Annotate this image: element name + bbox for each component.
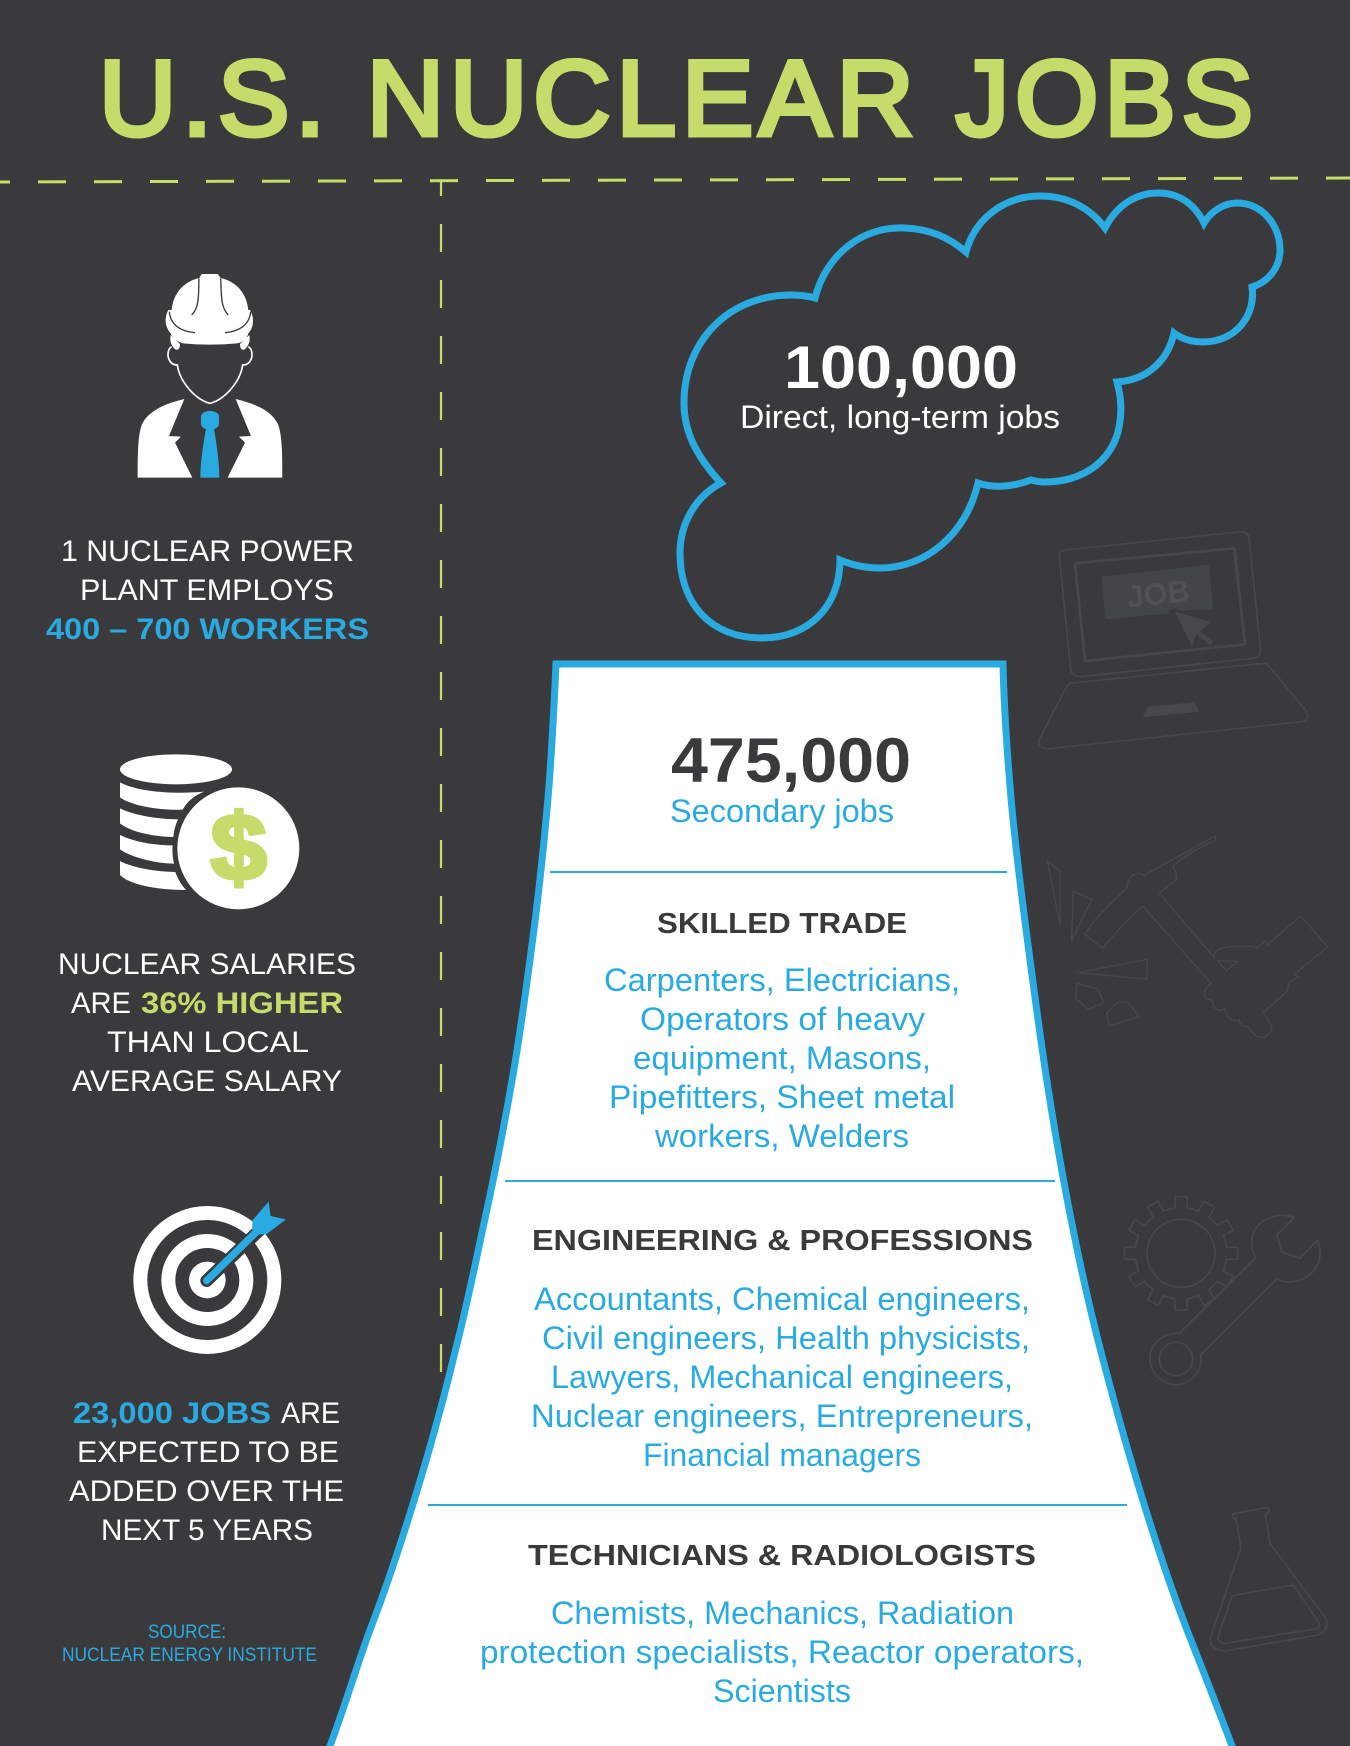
icon: laptop with job button: JOB (1125, 574, 1191, 615)
icon: gear and wrench (1124, 1197, 1320, 1385)
skilled trade section: Operators of heavy (640, 1001, 925, 1037)
stat: salaries: THAN LOCAL (107, 1026, 309, 1059)
stat: salaries: NUCLEAR SALARIES (58, 948, 356, 981)
stat: workers per plant (46, 535, 369, 646)
engineering and professions section: Accountants, Chemical engineers, (534, 1281, 1030, 1317)
skilled trade section: Pipefitters, Sheet metal (609, 1079, 955, 1115)
icon: pickaxe and hand (1047, 836, 1328, 1037)
stat: workers per plant: PLANT EMPLOYS (80, 574, 334, 607)
cloud caption: Direct, long-term jobs (740, 399, 1060, 435)
icon: coin stack with dollar (120, 754, 299, 909)
secondary jobs caption: Secondary jobs (670, 793, 894, 829)
stat: salaries (58, 948, 356, 1098)
skilled trade section: workers, Welders (654, 1118, 909, 1154)
stat: salaries: AVERAGE SALARY (72, 1065, 342, 1098)
skilled trade section: SKILLED TRADE (657, 908, 907, 940)
engineering and professions section: ENGINEERING & PROFESSIONS (532, 1225, 1033, 1257)
icon: worker in hard hat (138, 274, 282, 478)
stat: jobs to be added: 23,000 JOBS (73, 1397, 271, 1430)
cloud figure: 100,000 (784, 334, 1018, 401)
icon: laboratory flask (1210, 1508, 1327, 1651)
stat: salaries: 36% HIGHER (141, 987, 343, 1020)
panel: cooling tower (326, 664, 1236, 1746)
technicians and radiologists section: TECHNICIANS & RADIOLOGISTS (528, 1540, 1036, 1572)
skilled trade section: Carpenters, Electricians, (604, 962, 960, 998)
engineering and professions section: Lawyers, Mechanical engineers, (551, 1359, 1013, 1395)
skilled trade section: equipment, Masons, (633, 1040, 931, 1076)
stat: jobs to be added (69, 1397, 344, 1547)
stat: jobs to be added: ADDED OVER THE (69, 1475, 344, 1508)
engineering and professions section (531, 1225, 1033, 1473)
stat: jobs to be added: NEXT 5 YEARS (101, 1514, 313, 1547)
title: U.S. NUCLEAR JOBS (99, 38, 1253, 158)
technicians and radiologists section: protection specialists, Reactor operators, (480, 1634, 1084, 1670)
engineering and professions section: Financial managers (643, 1437, 921, 1473)
cloud: direct jobs (680, 193, 1280, 638)
icon: coin stack with dollar: $ (211, 795, 267, 899)
stat: workers per plant: 1 NUCLEAR POWER (61, 535, 354, 568)
technicians and radiologists section (480, 1540, 1084, 1709)
technicians and radiologists section: Scientists (713, 1673, 851, 1709)
source: NUCLEAR ENERGY INSTITUTE (62, 1645, 317, 1666)
source (62, 1622, 317, 1666)
source: SOURCE: (148, 1622, 226, 1643)
stat: jobs to be added: EXPECTED TO BE (77, 1436, 339, 1469)
stat: jobs to be added: ARE (281, 1397, 340, 1430)
stat: workers per plant: 400 – 700 WORKERS (46, 613, 369, 646)
icon: target with arrow (140, 1202, 286, 1347)
stat: salaries: ARE (71, 987, 131, 1020)
technicians and radiologists section: Chemists, Mechanics, Radiation (551, 1595, 1014, 1631)
engineering and professions section: Civil engineers, Health physicists, (542, 1320, 1030, 1356)
engineering and professions section: Nuclear engineers, Entrepreneurs, (531, 1398, 1033, 1434)
icon: laptop with job button (1039, 532, 1308, 749)
secondary jobs figure: 475,000 (671, 726, 911, 796)
skilled trade section (604, 908, 960, 1154)
